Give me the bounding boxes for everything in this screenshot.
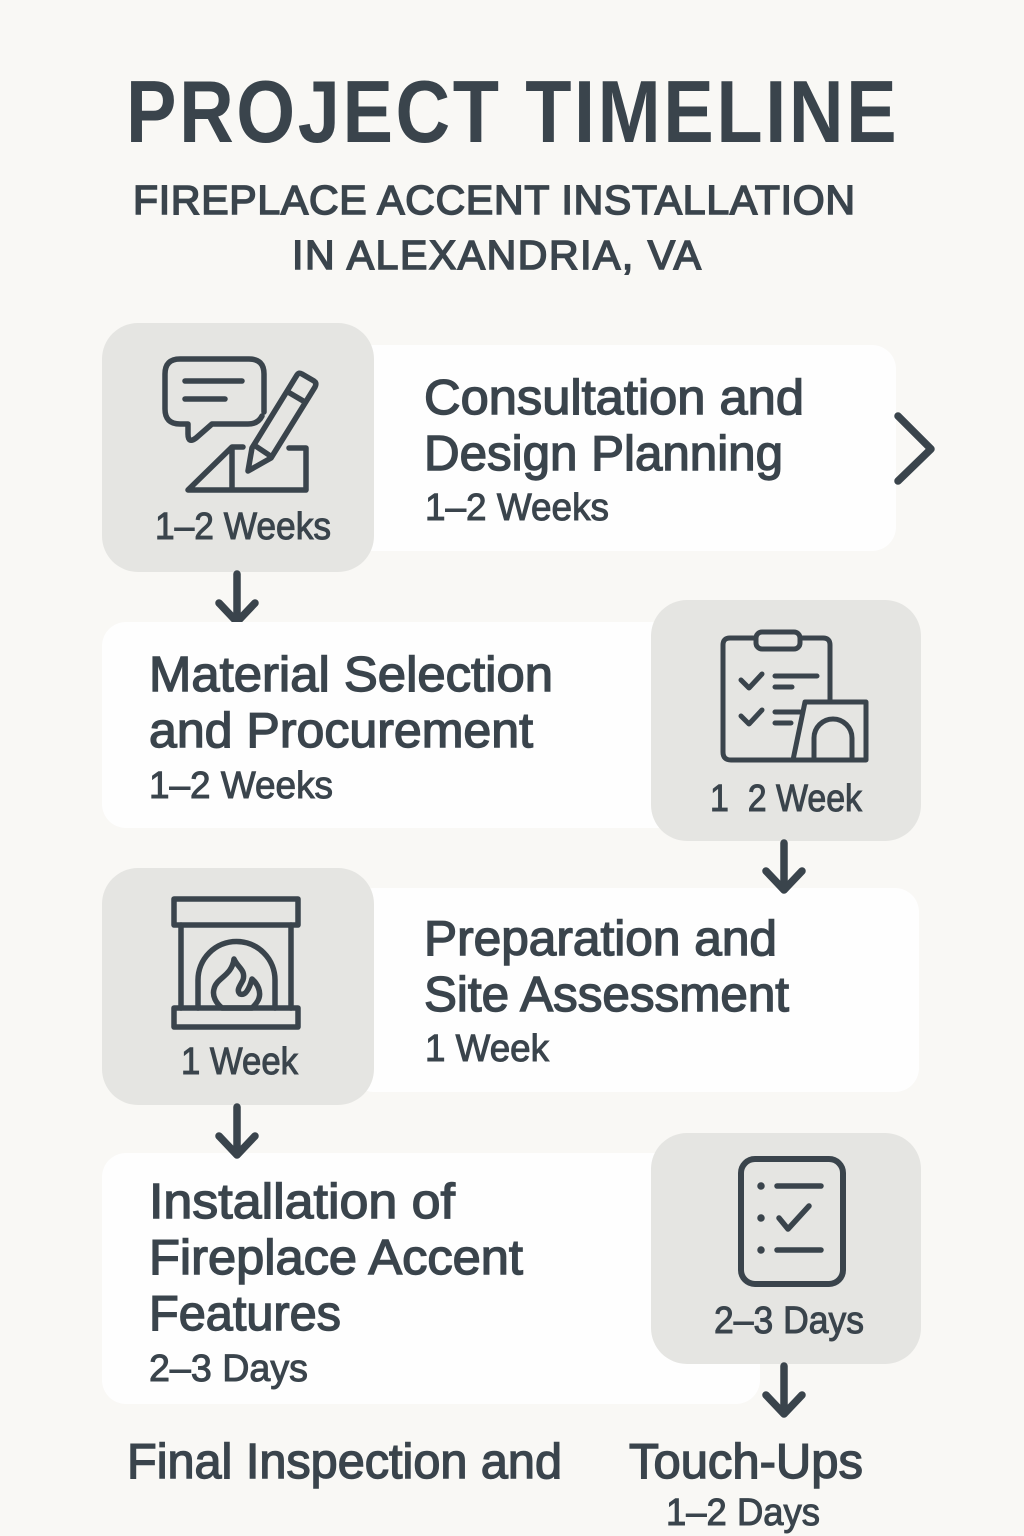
step duration: 1–2 Weeks [425, 487, 609, 529]
step duration: 1 Week [425, 1028, 550, 1070]
arrow: step 3 to step 4 [219, 1107, 255, 1155]
panel: step 4 installation [102, 1133, 921, 1404]
step duration: 2–3 Days [149, 1348, 308, 1390]
step heading: and Procurement [149, 704, 533, 758]
step heading: Fireplace Accent [149, 1231, 523, 1285]
icon: fireplace with flame [174, 899, 298, 1027]
duration label: 1–2 Weeks [155, 506, 331, 548]
icon: checklist clipboard with fireplace [723, 632, 866, 760]
arrow: chevron right [898, 416, 931, 481]
icon: document checklist [741, 1159, 843, 1284]
step 5: final inspection: 1–2 Days [666, 1492, 820, 1534]
duration label: 2–3 Days [714, 1300, 864, 1342]
step heading [424, 371, 804, 481]
step heading [149, 1175, 523, 1341]
panel: step 3 preparation [102, 868, 919, 1105]
title: PROJECT TIMELINE [126, 64, 897, 161]
duration label: 1 Week [181, 1041, 299, 1083]
step 5: final inspection: Final Inspection and [127, 1435, 562, 1489]
step heading: Features [149, 1287, 341, 1341]
icon: speech bubble, pencil and ruler [165, 359, 316, 490]
panel: step 2 material selection [102, 600, 921, 841]
step 5: final inspection: Touch-Ups [629, 1435, 863, 1489]
arrow: step 1 to step 2 [219, 574, 255, 622]
step heading: Consultation and [424, 371, 804, 425]
step heading [149, 648, 553, 758]
step duration: 1–2 Weeks [149, 765, 333, 807]
arrow: step 2 to step 3 [766, 843, 802, 890]
arrow: step 4 to step 5 [766, 1366, 802, 1414]
subtitle: IN ALEXANDRIA, VA [292, 232, 702, 278]
duration label: 1 2 Week [710, 778, 863, 820]
step heading: Site Assessment [424, 968, 789, 1022]
panel: step 1 consultation [102, 323, 896, 572]
step heading: Preparation and [424, 912, 777, 966]
subtitle: FIREPLACE ACCENT INSTALLATION [133, 177, 855, 223]
step heading: Material Selection [149, 648, 553, 702]
step 5: final inspection [127, 1435, 863, 1534]
step heading: Installation of [149, 1175, 455, 1229]
step heading: Design Planning [424, 427, 783, 481]
subtitle [133, 177, 855, 278]
step heading [424, 912, 789, 1022]
